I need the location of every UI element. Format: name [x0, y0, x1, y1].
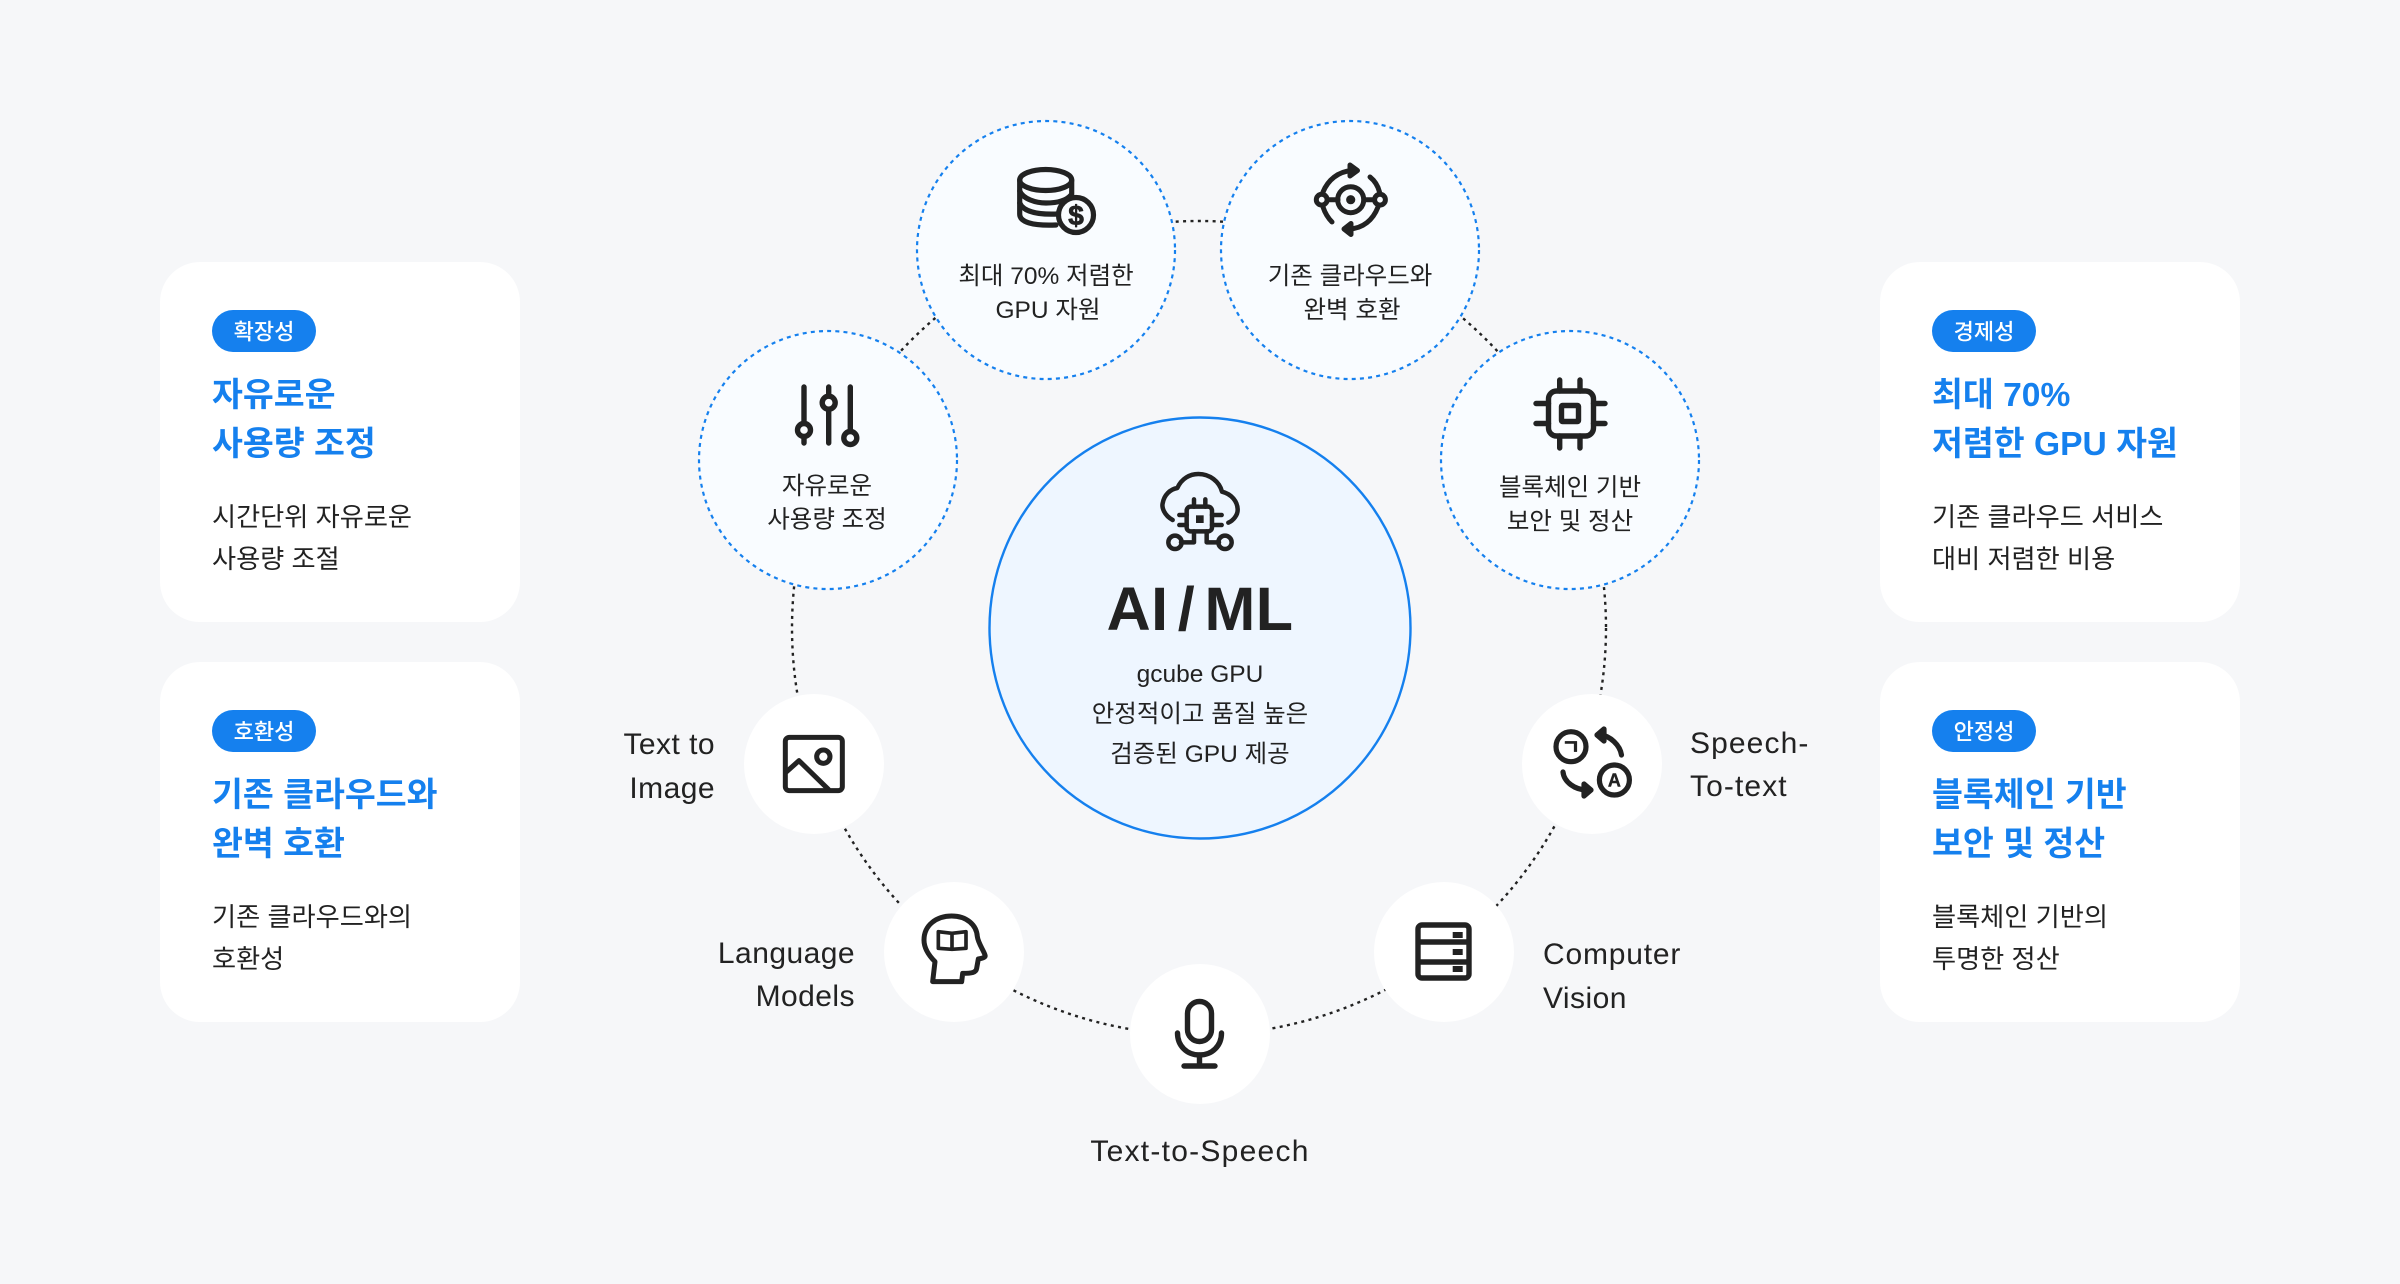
feature circle: flexible usage: [699, 331, 957, 589]
icon: translate: A: [1608, 770, 1621, 790]
node: Speech-To-text: To-text: [1690, 770, 1788, 803]
node: Computer Vision: Vision: [1543, 982, 1627, 1015]
icon: translate: ㄱ: [1562, 737, 1580, 759]
feature circle: low cost GPU: 최대 70% 저렴한: [958, 262, 1134, 290]
node: Text to Image: Text to: [623, 728, 715, 761]
feature circle: blockchain: 보안 및 정산: [1507, 508, 1633, 536]
center circle: AI / ML: [990, 418, 1410, 838]
dotted orbit ring: [792, 221, 1606, 1035]
node: Text to Image: Image: [629, 772, 715, 805]
node: Speech-To-text: Speech-: [1690, 727, 1809, 760]
feature circle: low cost GPU: GPU 자원: [996, 296, 1100, 324]
panel: economy card: [1880, 262, 2240, 622]
panel: stability card: 블록체인 기반: [1932, 776, 2127, 814]
node: Language Models: Models: [756, 980, 855, 1013]
node: Computer Vision: Computer: [1543, 938, 1681, 971]
icon: translate: [1556, 729, 1629, 796]
panel: scalability card: 사용량 조정: [212, 425, 376, 463]
node: Computer Vision: [1374, 882, 1681, 1022]
feature circle: low cost GPU: [917, 121, 1175, 379]
center circle: AI / ML: 검증된 GPU 제공: [1110, 740, 1290, 768]
feature circle: blockchain: 블록체인 기반: [1499, 474, 1641, 502]
panel: compatibility card: 기존 클라우드와의: [212, 902, 412, 932]
icon: head with book: [924, 916, 985, 982]
node: Speech-To-text: [1522, 694, 1809, 834]
panel: stability card: 안정성: [1954, 720, 2014, 744]
panel: compatibility card: 기존 클라우드와: [212, 777, 438, 814]
icon: coins database: $: [1068, 200, 1084, 231]
icon: sliders: [798, 387, 857, 444]
feature circle: cloud compatibility: [1221, 121, 1479, 379]
panel: scalability card: 사용량 조절: [212, 544, 340, 574]
node: Text to Image: [623, 694, 884, 834]
panel: compatibility card: 완벽 호환: [212, 825, 345, 863]
panel: compatibility card: [160, 662, 520, 1022]
panel: compatibility card: 호환성: [212, 944, 284, 974]
panel: stability card: [1880, 662, 2240, 1022]
icon: cloud chip: [1162, 474, 1238, 549]
icon: server: [1418, 925, 1469, 978]
icon: chip: [1536, 380, 1605, 448]
icon: microphone: [1178, 1002, 1222, 1066]
panel: stability card: 블록체인 기반의: [1932, 902, 2108, 932]
icon: picture: [785, 737, 842, 791]
feature circle: blockchain: [1441, 331, 1699, 589]
panel: compatibility card: 호환성: [234, 720, 294, 744]
node: Language Models: Language: [718, 937, 855, 970]
feature circle: cloud compatibility: 완벽 호환: [1304, 296, 1400, 324]
icon: sync orbit: [1316, 165, 1385, 234]
panel: economy card: 저렴한 GPU 자원: [1932, 425, 2178, 463]
panel: scalability card: 확장성: [234, 320, 294, 344]
center circle: AI / ML: gcube GPU: [1137, 661, 1263, 688]
panel: scalability card: 자유로운: [212, 377, 336, 414]
feature circle: cloud compatibility: 기존 클라우드와: [1268, 262, 1432, 290]
node: Text-to-Speech: [1090, 964, 1310, 1168]
node: Language Models: [718, 882, 1024, 1022]
node: Text-to-Speech: Text-to-Speech: [1090, 1135, 1310, 1168]
icon: coins database: [1020, 170, 1094, 232]
panel: economy card: 최대 70%: [1932, 377, 2070, 414]
panel: economy card: 대비 저렴한 비용: [1932, 544, 2115, 574]
center circle: AI / ML: AI / ML: [1107, 575, 1293, 643]
feature circle: flexible usage: 자유로운: [782, 472, 872, 500]
panel: economy card: 기존 클라우드 서비스: [1932, 502, 2163, 532]
panel: stability card: 보안 및 정산: [1932, 826, 2105, 863]
feature circle: flexible usage: 사용량 조정: [767, 506, 887, 534]
panel: scalability card: 시간단위 자유로운: [212, 502, 412, 532]
panel: scalability card: [160, 262, 520, 622]
center circle: AI / ML: 안정적이고 품질 높은: [1092, 700, 1308, 728]
panel: economy card: 경제성: [1954, 320, 2014, 344]
panel: stability card: 투명한 정산: [1932, 944, 2060, 974]
